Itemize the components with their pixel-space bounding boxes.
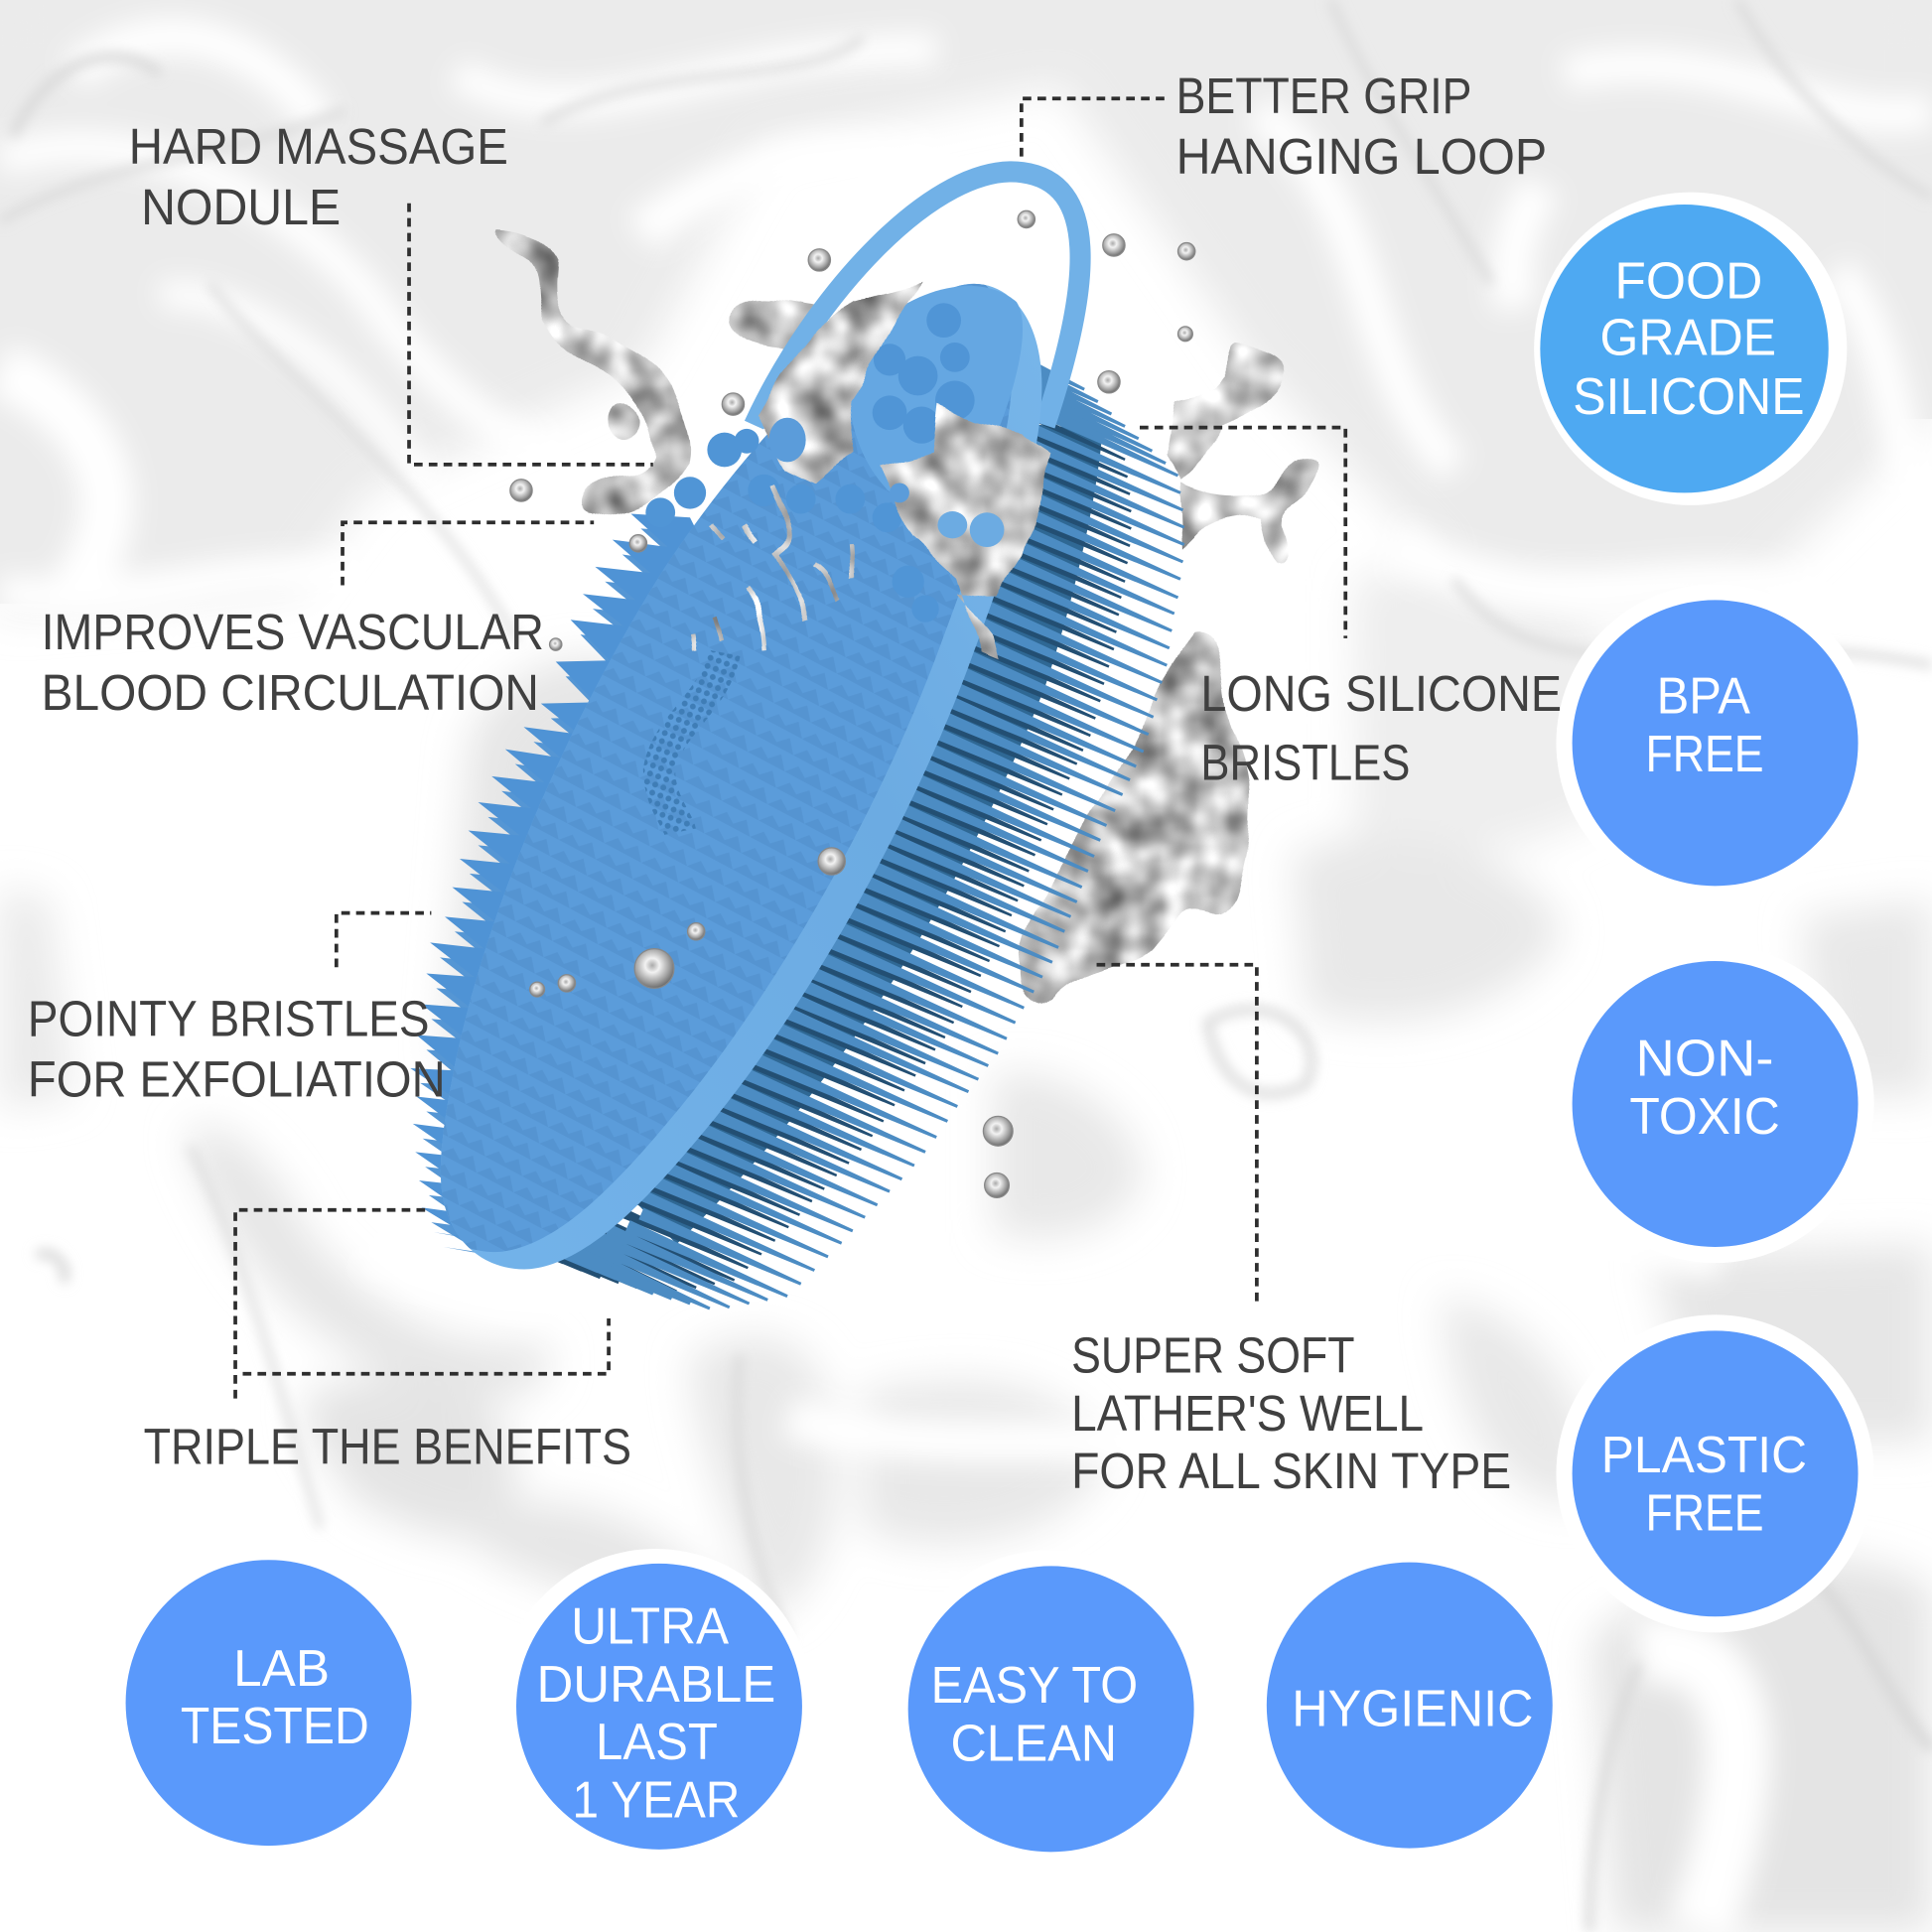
label: long silicone bristles bbox=[1200, 665, 1562, 791]
label: long silicone bristles: BRISTLES bbox=[1200, 735, 1410, 791]
badge: plastic free bbox=[1556, 1314, 1874, 1632]
chrome splash behind bristles bbox=[731, 298, 1320, 1003]
label: improves vascular blood circulation: BLOOD CIRCULATION bbox=[42, 664, 539, 721]
badge: food grade silicone: GRADE bbox=[1600, 309, 1776, 366]
label: improves vascular blood circulation bbox=[42, 604, 544, 721]
back bristles bbox=[483, 311, 1184, 1309]
label: better grip hanging loop: BETTER GRIP bbox=[1176, 68, 1471, 124]
callout leader: vascular circulation bbox=[343, 522, 594, 586]
pointy front spikes bbox=[410, 514, 750, 1259]
droplets bbox=[510, 210, 1195, 1197]
label: triple the benefits: TRIPLE THE BENEFITS bbox=[144, 1418, 631, 1474]
badge: easy to clean: EASY TO bbox=[931, 1657, 1138, 1715]
badge: non-toxic bbox=[1556, 945, 1874, 1263]
dotted wave on face bbox=[659, 653, 725, 832]
hanging loop bbox=[755, 172, 1080, 425]
callout leader: hanging loop bbox=[1022, 98, 1165, 160]
label: improves vascular blood circulation: IMPROVES VASCULAR bbox=[42, 604, 544, 660]
callout leader: super soft bbox=[1097, 965, 1257, 1307]
badge: food grade silicone: FOOD bbox=[1614, 252, 1762, 310]
badge: hygienic bbox=[1267, 1563, 1553, 1849]
label: hard massage nodule: NODULE bbox=[141, 179, 341, 235]
nodule pad bbox=[645, 286, 1023, 622]
label: super soft lather bbox=[1071, 1327, 1511, 1499]
badge: ultra durable last 1 year bbox=[497, 1549, 813, 1864]
badge: lab tested: TESTED bbox=[181, 1698, 369, 1755]
badge: ultra durable last 1 year: DURABLE bbox=[536, 1656, 775, 1714]
badge: bpa free: FREE bbox=[1645, 726, 1764, 783]
badge: food grade silicone: SILICONE bbox=[1573, 368, 1805, 426]
badge: easy to clean bbox=[893, 1550, 1210, 1867]
badge: hygienic: HYGIENIC bbox=[1292, 1681, 1534, 1738]
callout leader: pointy bristles bbox=[337, 913, 431, 967]
label: pointy bristles for exfoliation bbox=[28, 991, 446, 1108]
badge: ultra durable last 1 year: LAST bbox=[596, 1714, 718, 1771]
badge: lab tested: LAB bbox=[233, 1640, 330, 1698]
callout leader: triple benefits bbox=[235, 1210, 609, 1405]
label: better grip hanging loop: HANGING LOOP bbox=[1176, 128, 1547, 185]
badge: non-toxic: NON- bbox=[1636, 1030, 1774, 1087]
badge: bpa free: BPA bbox=[1657, 668, 1750, 726]
badge: easy to clean: CLEAN bbox=[950, 1715, 1117, 1772]
badge: non-toxic: TOXIC bbox=[1629, 1088, 1780, 1146]
label: hard massage nodule: HARD MASSAGE bbox=[129, 118, 508, 175]
badge: ultra durable last 1 year: ULTRA bbox=[571, 1598, 729, 1656]
badge: plastic free: FREE bbox=[1645, 1484, 1764, 1542]
badge: lab tested bbox=[118, 1548, 429, 1859]
badge: bpa free bbox=[1556, 584, 1874, 901]
label: pointy bristles for exfoliation: POINTY BRISTLES bbox=[28, 991, 430, 1047]
label: super soft lather: SUPER SOFT bbox=[1071, 1327, 1355, 1384]
callout leader: long bristles bbox=[1140, 428, 1345, 638]
label: pointy bristles for exfoliation: FOR EXFOLIATION bbox=[28, 1051, 446, 1108]
label: super soft lather: LATHER'S WELL bbox=[1071, 1385, 1424, 1442]
badge: ultra durable last 1 year: 1 YEAR bbox=[572, 1772, 740, 1830]
badge: food grade silicone bbox=[1534, 193, 1847, 505]
badge: plastic free: PLASTIC bbox=[1601, 1427, 1807, 1484]
brush rim and face bbox=[411, 267, 1041, 1269]
label: long silicone bristles: LONG SILICONE bbox=[1200, 665, 1562, 722]
label: better grip hanging loop bbox=[1176, 68, 1547, 185]
label: super soft lather: FOR ALL SKIN TYPE bbox=[1071, 1443, 1511, 1499]
left chrome tendril bbox=[498, 230, 692, 515]
label: hard massage nodule bbox=[129, 118, 508, 235]
chrome splash on brush bbox=[690, 282, 1052, 658]
callout leader: hard massage nodule bbox=[409, 204, 653, 465]
